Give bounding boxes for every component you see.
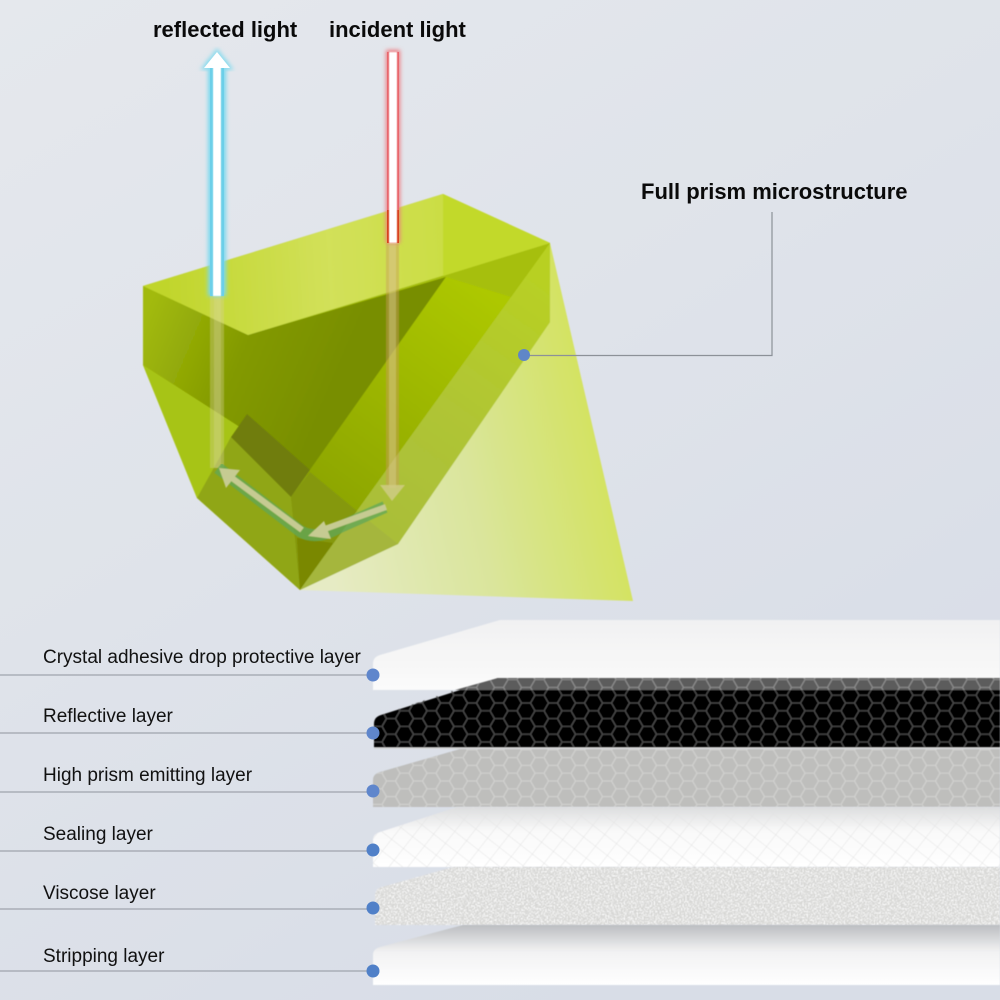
- heading: reflected light: reflected light: [153, 17, 298, 42]
- label: stripping layer: Stripping layer: [43, 946, 165, 967]
- reflected light arrow: [200, 48, 234, 296]
- right translucent band: [300, 243, 550, 590]
- label: sealing layer: [0, 824, 380, 856]
- label: high prism emitting layer: [0, 765, 380, 798]
- heading: full prism microstructure: Full prism microstructure: [641, 179, 908, 204]
- internal reflection path arrows: [218, 468, 386, 539]
- incident light arrow: [386, 50, 400, 243]
- label: high prism emitting layer: High prism emitting layer: [43, 765, 253, 786]
- inner lower face: [197, 437, 300, 590]
- label: viscose layer: Viscose layer: [43, 883, 156, 904]
- label: reflective layer: [0, 706, 380, 740]
- prism diagram: [143, 194, 633, 601]
- layer: sealing: [373, 807, 1000, 867]
- top face: [143, 194, 550, 335]
- lower left facet: [143, 365, 310, 498]
- callout: prism leader line: [518, 212, 772, 361]
- layer: stripping: [373, 925, 1000, 985]
- top right rear panel: [443, 194, 550, 276]
- label: viscose layer: [0, 883, 380, 914]
- heading: incident light: incident light: [329, 17, 467, 42]
- recessed dark panel: [231, 414, 310, 497]
- reflected light beam inside prism: [210, 296, 224, 468]
- facet below the fold line: [291, 472, 357, 590]
- label: crystal adhesive drop protective layer: [0, 647, 380, 682]
- layer: reflective: [374, 678, 1000, 749]
- bottom dark facet: [297, 538, 333, 590]
- prism body: [143, 194, 550, 590]
- layer: high prism emitting: [373, 749, 1000, 807]
- incident light beam inside prism: [380, 243, 405, 501]
- label: sealing layer: Sealing layer: [43, 824, 154, 845]
- label: reflective layer: Reflective layer: [43, 706, 174, 727]
- band lower facet: [300, 511, 398, 590]
- layer: viscose: [375, 867, 1000, 925]
- light projection triangle: [300, 243, 633, 601]
- front dark wall: [143, 277, 446, 497]
- inner lime face: [291, 277, 511, 590]
- label: crystal adhesive drop protective layer: Crystal adhesive drop protective layer: [43, 647, 362, 668]
- label: stripping layer: [0, 946, 380, 978]
- layer: crystal adhesive drop protective: [373, 620, 1000, 690]
